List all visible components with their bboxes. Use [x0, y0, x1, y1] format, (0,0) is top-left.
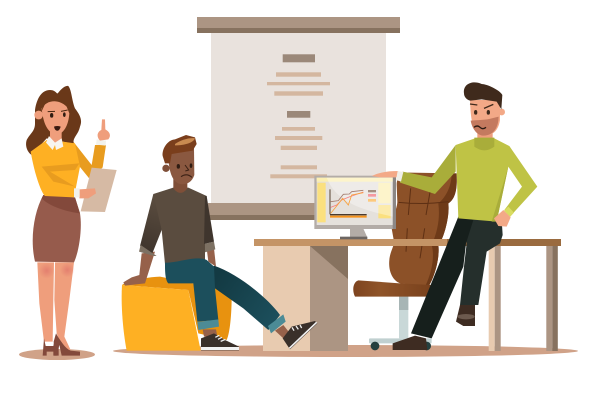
yellow cube seat: [122, 277, 232, 351]
neck and collar: [46, 128, 63, 150]
monitor dashboard panels: [317, 178, 393, 222]
near leg: [411, 217, 473, 338]
monitor legend: [368, 190, 376, 202]
monitor line chart: [330, 189, 367, 217]
sweater: [153, 188, 214, 264]
sweater: [400, 138, 537, 222]
ground shadow: woman: [19, 349, 95, 360]
front leg: [165, 258, 218, 322]
office chair: [353, 173, 457, 350]
person: seated man on yellow cube: [122, 135, 317, 351]
neck and head: [464, 82, 505, 143]
ground shadow: office floor: [113, 345, 578, 357]
sweater: [31, 140, 80, 197]
person: man leaning on desk: [372, 82, 537, 350]
person: woman with clipboard: [26, 86, 117, 356]
arms: [123, 194, 216, 286]
raised arm and hand: [73, 119, 110, 179]
head: [34, 93, 72, 135]
right hand on hip: [494, 210, 511, 227]
head: [162, 135, 197, 193]
far leg and raised shoe: [456, 217, 503, 326]
desk top front: [254, 239, 447, 246]
desk: [263, 239, 561, 351]
screen heading bar 2: [287, 111, 310, 118]
ankle and front shoe: [201, 329, 239, 350]
legs: [37, 262, 75, 350]
screen text lines 1: [267, 72, 330, 96]
hand on clipboard: [74, 188, 96, 198]
skirt: [33, 195, 81, 262]
planted shoe: [393, 336, 427, 350]
clipboard: [81, 168, 117, 212]
screen heading bar 1: [283, 54, 315, 62]
projection screen: [197, 17, 400, 220]
back leg and shoe: [207, 266, 317, 349]
screen text lines 2: [270, 127, 327, 178]
computer monitor: [314, 176, 396, 239]
jeans cuff: [197, 319, 219, 330]
hand on monitor: [372, 171, 403, 182]
hair back: [26, 86, 81, 155]
high heel shoes: [43, 333, 80, 356]
